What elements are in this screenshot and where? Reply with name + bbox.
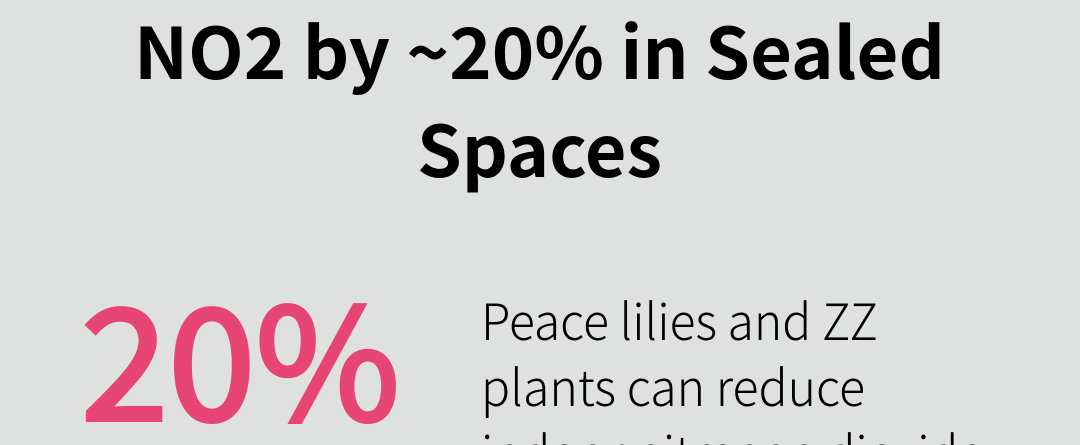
title: NO2 by ~20% in Sealed xyxy=(134,0,945,100)
title: Spaces xyxy=(417,96,662,198)
description text: plants can reduce xyxy=(481,349,865,421)
description text: Peace lilies and ZZ xyxy=(481,283,878,355)
title xyxy=(134,0,945,198)
description text xyxy=(481,283,984,445)
